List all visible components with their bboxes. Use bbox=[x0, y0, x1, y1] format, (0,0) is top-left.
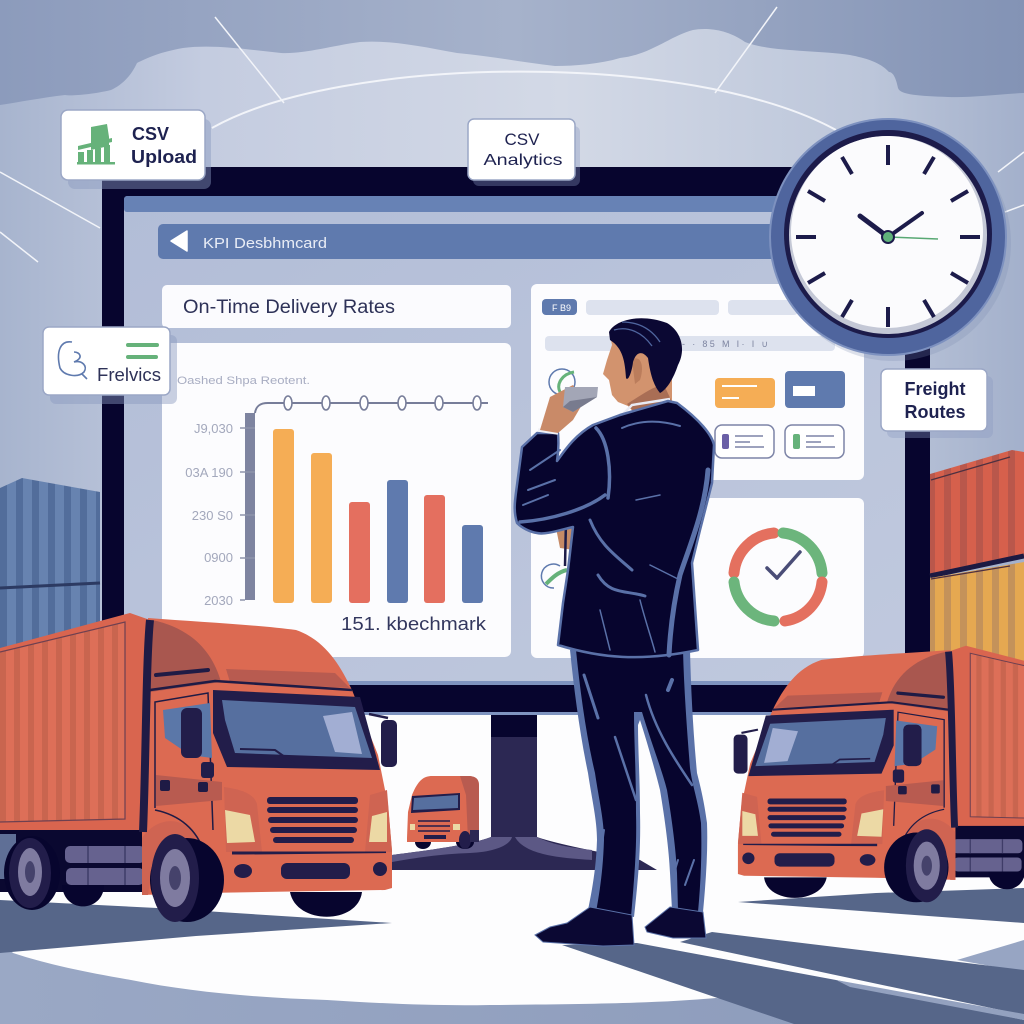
businessman bbox=[515, 318, 714, 946]
jacket highlights bbox=[520, 422, 708, 655]
donut gauge bbox=[734, 533, 822, 621]
ground shadows bbox=[0, 888, 1024, 1024]
monitor frame bbox=[102, 167, 930, 714]
outlined tile purple bbox=[715, 425, 774, 458]
shirt cuff bbox=[538, 430, 558, 433]
status icon bbox=[549, 369, 575, 395]
leg highlights bbox=[584, 675, 694, 885]
chart axis labels: J9,030 bbox=[194, 421, 233, 436]
floor bbox=[0, 714, 1024, 1024]
chart axis labels: 230 S0 bbox=[192, 508, 233, 523]
background rays bbox=[0, 7, 1024, 262]
chart axis labels: 2030 bbox=[204, 593, 233, 608]
shadow stripe bbox=[836, 980, 1024, 1020]
benchmark caption: 151. kbechmark bbox=[341, 614, 487, 634]
chart bars bbox=[273, 429, 483, 603]
panel: on-time delivery rates title bbox=[162, 285, 511, 328]
label: Frelvics: Frelvics bbox=[97, 365, 161, 385]
chart axis labels: 03A 190 bbox=[185, 465, 233, 480]
label: freight routes bbox=[881, 369, 993, 438]
label: CSV upload: Upload bbox=[131, 147, 197, 167]
monitor stand bbox=[392, 714, 657, 870]
lower hand bbox=[556, 518, 580, 550]
label: CSV analytics: Analytics bbox=[484, 152, 562, 169]
chart axis bbox=[240, 396, 488, 600]
orange tile bbox=[715, 378, 775, 408]
small status icon bbox=[541, 564, 567, 588]
analog clock bbox=[769, 118, 1011, 361]
background wall bbox=[0, 0, 1024, 720]
label: freight routes: Freight bbox=[904, 379, 966, 399]
KPI dashboard header bar bbox=[158, 224, 798, 259]
label: CSV upload bbox=[61, 110, 211, 189]
legs dark fill bbox=[576, 650, 701, 917]
face and neck bbox=[603, 335, 672, 415]
white collar bbox=[622, 399, 670, 415]
label: CSV analytics: CSV bbox=[505, 130, 540, 149]
monitor lower rim bbox=[102, 712, 930, 715]
sky with cloud edge bbox=[0, 0, 1024, 105]
label: CSV analytics bbox=[468, 119, 580, 186]
panel: KPI tiles: F B9 bbox=[552, 303, 571, 313]
panel: KPI tiles: - · 85 M I· I ∪ bbox=[682, 339, 768, 349]
small distant truck bbox=[407, 776, 479, 849]
shoes bbox=[535, 907, 706, 946]
legs blue silhouette bbox=[570, 650, 707, 917]
device bbox=[563, 387, 598, 412]
chart axis labels: 0900 bbox=[204, 550, 233, 565]
icon: green chart bbox=[77, 124, 115, 164]
outlined tile green bbox=[785, 425, 844, 458]
panel: on-time gauge bbox=[531, 498, 864, 658]
label: freight routes: Routes bbox=[904, 402, 966, 422]
blue tile bbox=[785, 371, 845, 408]
panel: KPI tiles bbox=[531, 284, 864, 480]
panel: on-time delivery rates title: On-Time Delivery Rates bbox=[183, 297, 395, 318]
panel: bar chart: Oashed Shpa Reotent. bbox=[177, 375, 310, 387]
container stack: right bbox=[930, 450, 1024, 670]
chart axis labels bbox=[185, 421, 233, 608]
left truck bbox=[0, 613, 397, 922]
jacket bbox=[515, 401, 714, 657]
container stack: left bbox=[0, 478, 100, 660]
hair bbox=[609, 318, 682, 393]
label: CSV upload: CSV bbox=[132, 124, 169, 144]
gauge check hands bbox=[767, 552, 800, 578]
label: Frelvics bbox=[43, 327, 177, 404]
KPI dashboard header bar: KPI Desbhmcard bbox=[203, 235, 327, 252]
panel: bar chart bbox=[162, 343, 511, 657]
ear bbox=[632, 358, 642, 384]
raised hand bbox=[540, 385, 583, 433]
icon: squiggle bbox=[58, 342, 87, 379]
right truck bbox=[734, 646, 1024, 902]
monitor screen bbox=[124, 196, 905, 685]
